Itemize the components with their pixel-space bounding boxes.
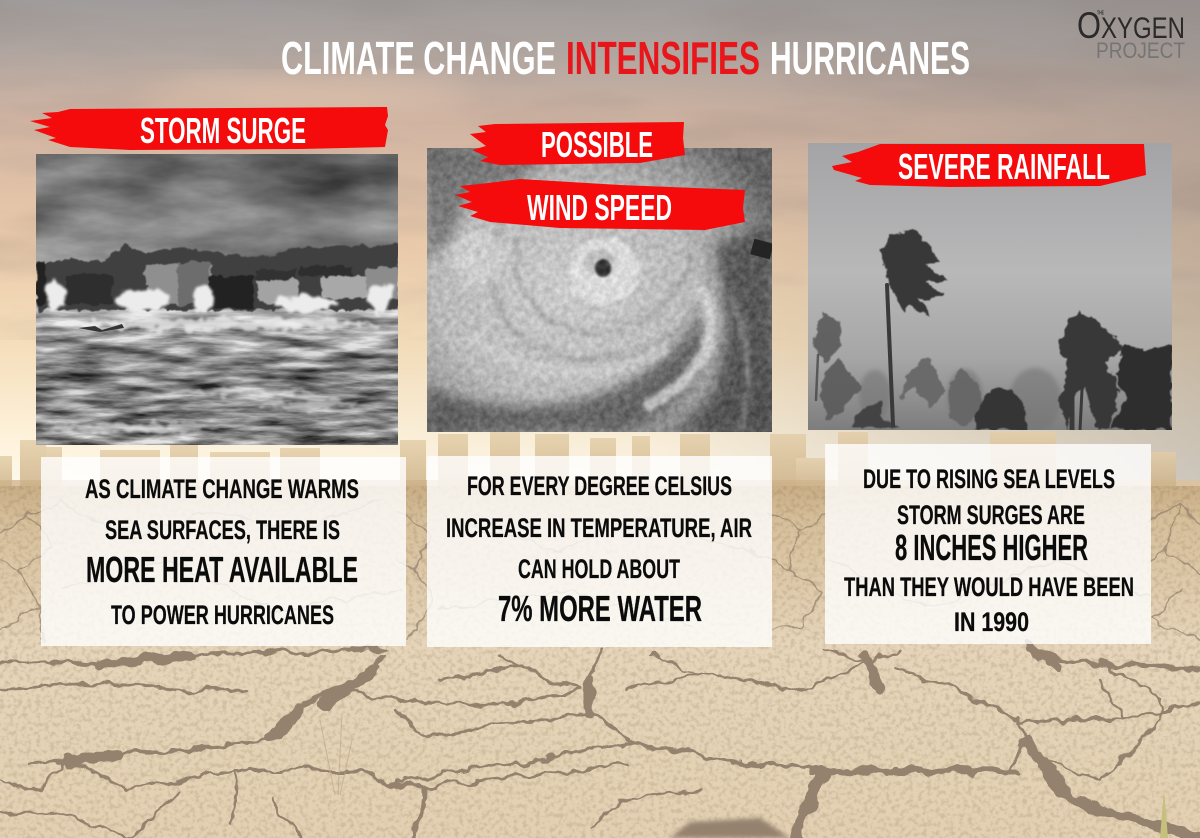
text block: 7% more water: CAN HOLD ABOUT <box>518 554 680 584</box>
background: city skyline <box>0 432 1176 492</box>
text block: more heat available <box>41 457 406 646</box>
panel: wind speed <box>427 122 774 432</box>
logo: The Oxygen Project <box>1077 5 1185 63</box>
text block: 7% more water <box>427 456 772 647</box>
text block: more heat available: TO POWER HURRICANES <box>111 600 334 630</box>
title: CLIMATE CHANGE <box>281 32 556 84</box>
logo: The Oxygen Project: PROJECT <box>1096 38 1185 63</box>
panel: storm surge <box>30 107 398 445</box>
text block: 8 inches higher: STORM SURGES ARE <box>897 500 1085 530</box>
banner: possible: POSSIBLE <box>541 124 653 165</box>
banner: wind speed <box>455 179 745 230</box>
title <box>281 32 970 84</box>
photo: waves hitting a seafront <box>36 154 398 445</box>
banner: possible <box>470 122 685 165</box>
logo: The Oxygen Project: THE <box>1097 10 1104 16</box>
photo: satellite hurricane <box>427 148 774 432</box>
background: cracked dry ground <box>0 486 1200 838</box>
logo: The Oxygen Project: O <box>1077 5 1101 46</box>
banner: severe rainfall <box>832 144 1146 187</box>
title: INTENSIFIES <box>566 32 760 84</box>
text block: 7% more water: 7% MORE WATER <box>498 588 702 629</box>
text block: 7% more water: INCREASE IN TEMPERATURE, AIR <box>446 513 752 543</box>
banner: wind speed: WIND SPEED <box>527 187 672 228</box>
text block: 8 inches higher: IN 1990 <box>954 607 1029 637</box>
text block: 7% more water: FOR EVERY DEGREE CELSIUS <box>467 471 732 501</box>
dry grass <box>320 715 352 795</box>
panel: severe rainfall <box>808 143 1172 432</box>
palm crowns <box>882 229 1172 430</box>
text block: more heat available: MORE HEAT AVAILABLE <box>86 549 358 590</box>
text block: more heat available: AS CLIMATE CHANGE WARMS <box>85 474 359 504</box>
banner: storm surge: STORM SURGE <box>140 110 306 151</box>
text block: 8 inches higher <box>825 444 1151 644</box>
banner: storm surge <box>30 107 388 151</box>
text block: more heat available: SEA SURFACES, THERE IS <box>105 515 340 545</box>
background: hazy sky <box>0 0 1200 480</box>
photo: palm trees in a storm <box>808 143 1172 432</box>
title: HURRICANES <box>770 32 970 84</box>
